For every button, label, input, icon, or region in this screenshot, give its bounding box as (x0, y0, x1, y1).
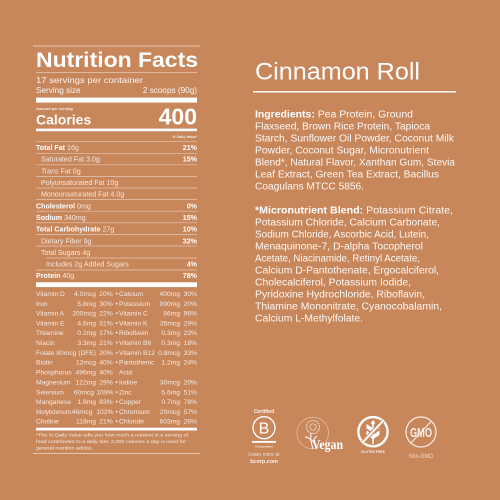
macronutrient table: 78% (183, 272, 198, 280)
micronutrient table: 0.8mcg (158, 350, 180, 357)
micronutrient table: 603mg (160, 419, 180, 426)
micronutrient table: 86mg (163, 310, 180, 318)
macronutrient table (36, 142, 198, 280)
icon: non-gmo (406, 417, 436, 460)
micronutrient table: 122mg (76, 380, 96, 386)
text block: micronutrient blend (255, 205, 453, 324)
text block: micronutrient blend: Calcium L-Methylfolate. (255, 313, 363, 324)
micronutrient table: 18% (184, 340, 197, 347)
micronutrient table: 200mcg (72, 310, 96, 318)
micronutrient table: 46mcg (72, 409, 93, 416)
text block: micronutrient blend: Sodium Chloride, Ascorbic Acid, Lutein, (255, 229, 429, 240)
micronutrient table: 400mg (160, 291, 180, 298)
text block: micronutrient blend: Potassium Chloride, Calcium Carbonate, (255, 217, 440, 228)
servings information: Serving size (36, 86, 81, 95)
micronutrient table: 29% (184, 320, 197, 327)
icon: certified b corporation (248, 409, 280, 465)
micronutrient table: Magnesium (36, 380, 71, 386)
micronutrient table: • (116, 409, 118, 416)
icon: certified b corporation: Certified (254, 409, 274, 415)
micronutrient table: 40% (99, 370, 113, 377)
micronutrient table: Thiamine (36, 330, 64, 337)
micronutrient table: Vitamin B12 (119, 350, 155, 357)
macronutrient table: 21% (183, 144, 198, 152)
micronutrient table: Vitamin D (36, 291, 65, 298)
micronutrient table: Molybdenum (36, 409, 71, 416)
micronutrient table: • (116, 291, 118, 298)
macronutrient table: Protein 40g (36, 272, 74, 280)
text block: ingredients (255, 110, 456, 193)
icon: vegan sunflower: Vegan (312, 438, 343, 453)
micronutrient table: Calcium (119, 291, 144, 298)
text block: micronutrient blend: Cholecalciferol, Potassium Iodide, (255, 277, 411, 288)
title: cinnamon roll: Cinnamon Roll (255, 58, 420, 85)
micronutrient table: Selenium (36, 389, 64, 396)
text block: micronutrient blend: Acetate, Niacinamide, Retinyl Acetate, (255, 253, 420, 264)
icon: gluten free (358, 417, 388, 454)
micronutrient table: 23% (184, 330, 197, 337)
micronutrient table: Chloride (119, 419, 144, 426)
micronutrient table: 12mcg (76, 360, 96, 367)
panel: nutrition facts (33, 46, 200, 454)
macronutrient table: 4% (187, 260, 198, 268)
micronutrient table: Vitamin B6 (119, 340, 151, 347)
icon: certified b corporation: B (259, 421, 269, 438)
macronutrient table: Total Fat 16g (36, 144, 79, 152)
text block: ingredients: Coagulans MTCC 5856. (255, 182, 364, 193)
micronutrient table: • (116, 310, 118, 318)
text block: micronutrient blend: *Micronutrient Blend: Potassium Citrate, (255, 205, 453, 216)
servings information (36, 76, 197, 95)
micronutrient table: 21% (99, 340, 113, 347)
micronutrient table: 3.3mg (77, 340, 96, 347)
micronutrient table: Copper (119, 399, 142, 406)
macronutrient table: Total Sugars 4g (41, 249, 90, 257)
text block: micronutrient blend: Pyridoxine Hydrochloride, Riboflavin, (255, 289, 425, 300)
micronutrient table: • (116, 340, 118, 347)
macronutrient table: 32% (183, 237, 198, 245)
micronutrient table: 60mcg (74, 389, 94, 396)
macronutrient table: Polyunsaturated Fat 10g (41, 179, 118, 187)
icon: certified b corporation: bcorp.com (250, 459, 278, 465)
micronutrient table: • (116, 301, 118, 308)
micronutrient table: • (116, 419, 118, 426)
micronutrient table: • (116, 350, 118, 357)
macronutrient table: Dietary Fiber 9g (41, 237, 92, 245)
icon: vegan sunflower (297, 417, 343, 453)
heading: nutrition facts: Nutrition Facts (36, 48, 198, 72)
micronutrient table: 118mg (76, 419, 96, 426)
micronutrient table: 990mg (160, 301, 180, 308)
macronutrient table: Sodium 340mg (36, 214, 86, 222)
micronutrient table: Iodine (119, 380, 138, 386)
icon: certified b corporation: Learn more at (248, 452, 280, 458)
macronutrient table: 15% (183, 214, 198, 222)
micronutrient table: Iron (36, 301, 48, 308)
text block: ingredients: Ingredients: Pea Protein, Ground (255, 110, 413, 121)
micronutrient table: Pantothenic (119, 360, 155, 367)
micronutrient table: Chromium (119, 409, 150, 416)
text block: ingredients: Leaf Extract, Green Tea Extract, Bacillus (255, 170, 439, 181)
micronutrient table: 51% (184, 389, 197, 396)
micronutrient table: Riboflavin (119, 330, 149, 337)
footnote: *The % Daily Value tells you how much a nutrient in a serving of (36, 433, 189, 438)
micronutrient table: Acid (119, 370, 132, 377)
micronutrient table: Vitamin A (36, 310, 65, 318)
micronutrient table: 5.6mg (161, 389, 180, 396)
micronutrient table: Phosphorus (36, 370, 72, 377)
icon: non-gmo: GMO (410, 425, 432, 440)
daily value header: % Daily Value* (172, 135, 198, 139)
icon: gluten free: GLUTEN FREE (361, 450, 386, 454)
macronutrient table: 15% (183, 156, 198, 164)
micronutrient table: 0.2mg (77, 330, 96, 337)
micronutrient table: • (116, 330, 118, 337)
micronutrient table: 4.0mcg (74, 291, 96, 298)
micronutrient table (36, 291, 197, 426)
micronutrient table: 26% (184, 419, 197, 426)
micronutrient table: 109% (96, 389, 114, 396)
micronutrient table: Choline (36, 419, 59, 426)
micronutrient table: 30% (184, 291, 197, 298)
calories: Calories (36, 112, 91, 128)
micronutrient table: 1.2mg (161, 360, 180, 367)
micronutrient table: 35mcg (160, 320, 180, 327)
micronutrient table: • (116, 380, 118, 386)
micronutrient table: 30% (99, 301, 113, 308)
micronutrient table: 0.3mg (161, 330, 180, 337)
micronutrient table: 496mg (76, 370, 96, 377)
micronutrient table: 5.8mg (77, 301, 96, 308)
calories: Amount per serving (36, 106, 73, 111)
servings information: 2 scoops (90g) (143, 86, 197, 95)
micronutrient table: 33% (184, 350, 197, 357)
micronutrient table: 4.6mg (77, 320, 96, 327)
micronutrient table: 21% (99, 419, 113, 426)
footnote: food contributes to a daily diet. 2,000 calories a day is used for (36, 439, 187, 444)
micronutrient table: 40% (99, 360, 113, 367)
icon: certified b corporation: Corporation (255, 444, 273, 448)
micronutrient table: 20mcg (160, 409, 180, 416)
micronutrient table: 29% (99, 380, 113, 386)
micronutrient table: Folate 80mcg (DFE) (36, 350, 96, 357)
footnote: general nutrition advice. (36, 446, 93, 450)
text block: ingredients: Powder, Coconut Sugar, Micronutrient (255, 146, 429, 157)
text block: micronutrient blend: Calcium D-Pantothenate, Ergocalciferol, (255, 265, 439, 276)
micronutrient table: 22% (99, 310, 113, 318)
micronutrient table: 96% (184, 310, 197, 318)
calories (36, 104, 197, 130)
micronutrient table: Zinc (119, 389, 132, 396)
micronutrient table: 20% (184, 380, 197, 386)
calories: 400 (159, 104, 197, 130)
text block: ingredients: Starch, Sunflower Oil Powder, Coconut Milk (255, 134, 454, 145)
micronutrient table: 0.7mg (161, 399, 180, 406)
micronutrient table: 30mcg (160, 380, 180, 386)
macronutrient table: Monounsaturated Fat 4.0g (41, 191, 124, 199)
micronutrient table: Vitamin E (36, 320, 65, 327)
micronutrient table: Vitamin C (119, 310, 148, 318)
micronutrient table: Biotin (36, 360, 53, 367)
micronutrient table: Niacin (36, 340, 55, 347)
micronutrient table: 57% (184, 409, 197, 416)
macronutrient table: 10% (183, 226, 198, 234)
micronutrient table: 1.9mg (77, 399, 96, 406)
micronutrient table: Potassium (119, 301, 151, 308)
micronutrient table: 102% (96, 409, 114, 416)
macronutrient table: Cholesterol 0mg (36, 202, 91, 210)
text block: micronutrient blend: Menaquinone-7, D-alpha Tocopherol (255, 241, 423, 252)
micronutrient table: 20% (184, 301, 197, 308)
micronutrient table: 20% (99, 291, 113, 298)
micronutrient table: 78% (184, 399, 197, 406)
macronutrient table: Saturated Fat 3.0g (41, 156, 100, 164)
micronutrient table: 0.3mg (161, 340, 180, 347)
macronutrient table: Total Carbohydrate 27g (36, 226, 114, 234)
micronutrient table: Vitamin K (119, 320, 148, 327)
micronutrient table: • (116, 399, 118, 406)
text block: ingredients: Blend*, Natural Flavor, Xanthan Gum, Stevia (255, 158, 456, 169)
micronutrient table: • (116, 360, 118, 367)
text block: micronutrient blend: Thiamine Mononitrate, Cyanocobalamin, (255, 301, 442, 312)
micronutrient table: • (116, 389, 118, 396)
macronutrient table: Trans Fat 0g (41, 167, 81, 175)
micronutrient table: 20% (99, 350, 113, 357)
servings information: 17 servings per container (36, 76, 143, 85)
macronutrient table: Includes 2g Added Sugars (46, 260, 129, 268)
micronutrient table: 24% (184, 360, 197, 367)
micronutrient table: Manganese (36, 399, 71, 406)
micronutrient table: 31% (99, 320, 113, 327)
micronutrient table: 83% (99, 399, 113, 406)
micronutrient table: • (116, 320, 118, 327)
footnote (36, 433, 189, 450)
text block: ingredients: Flaxseed, Brown Rice Protein, Tapioca (255, 122, 431, 133)
macronutrient table: 0% (187, 202, 198, 210)
icon: non-gmo: Non-GMO (409, 453, 433, 460)
micronutrient table: 17% (99, 330, 113, 337)
